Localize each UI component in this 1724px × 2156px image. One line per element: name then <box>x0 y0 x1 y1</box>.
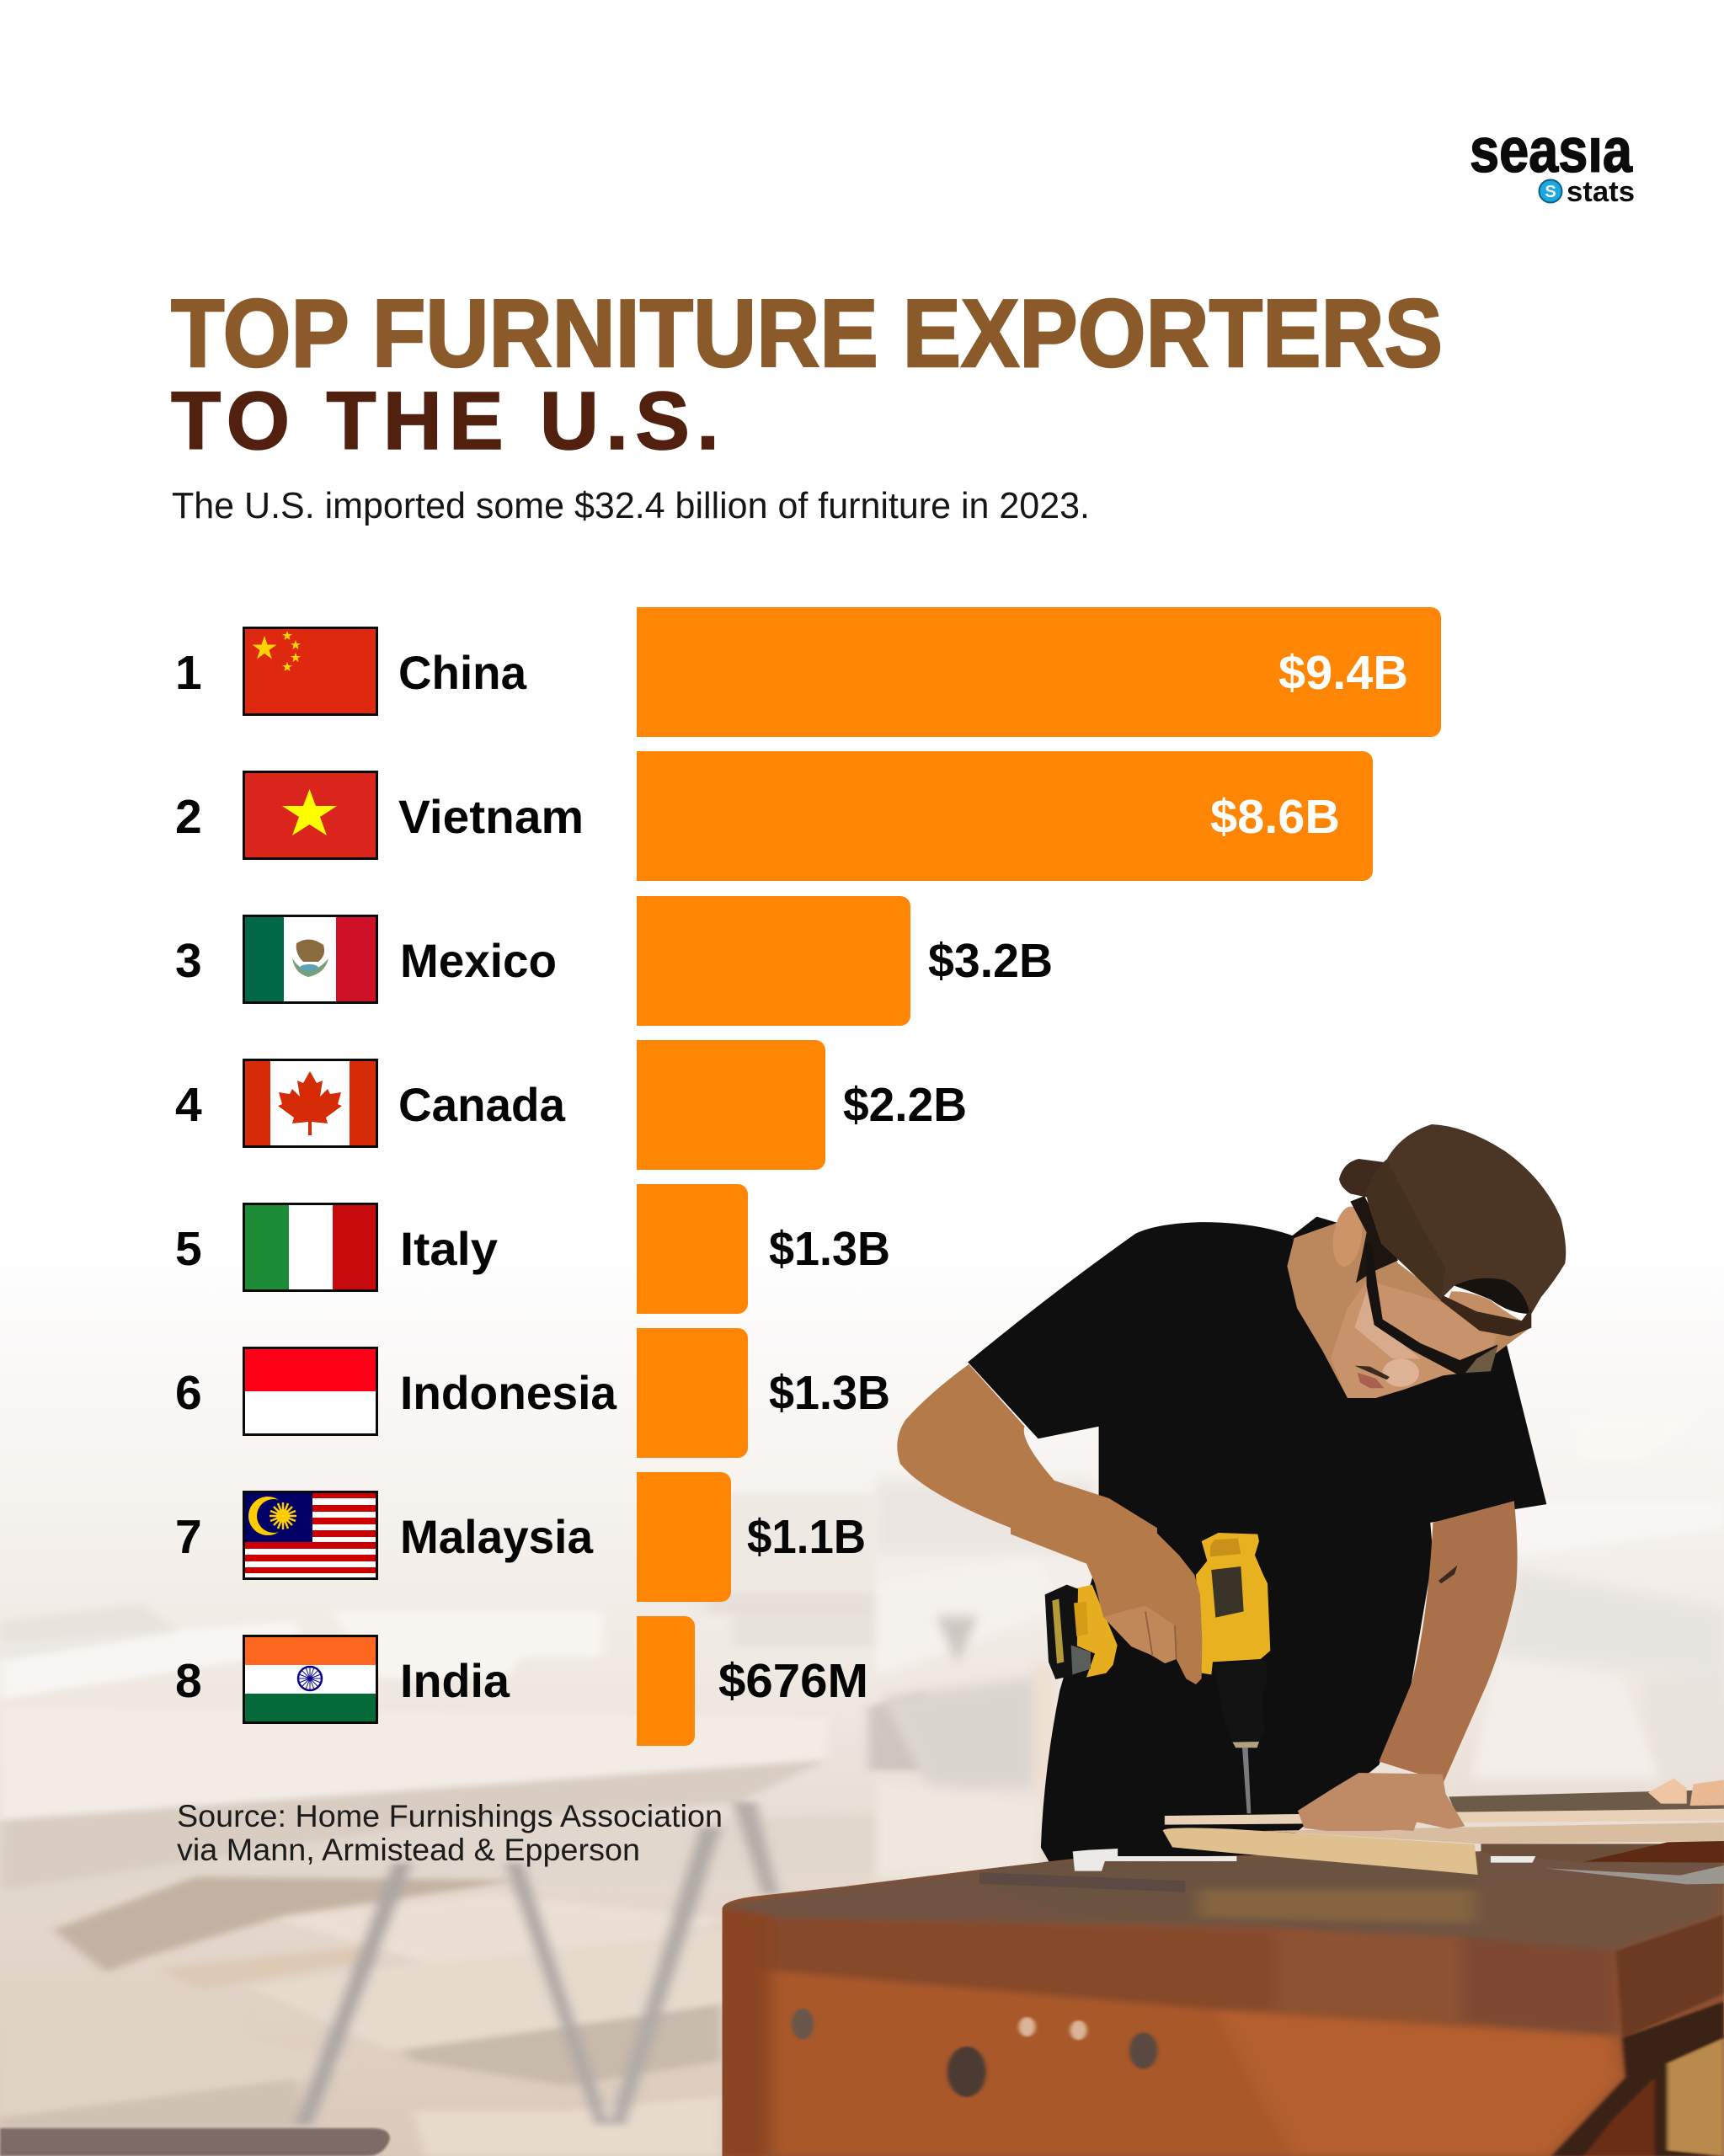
row 2: Vietnam <box>175 751 1373 881</box>
row 7: Malaysia: $1.1B <box>747 1510 866 1564</box>
drill bit <box>1242 1748 1251 1813</box>
hand on board <box>1298 1773 1465 1831</box>
flag: Vietnam <box>244 771 377 859</box>
logo: stats <box>1567 176 1635 208</box>
row 1: China <box>175 607 1441 737</box>
logo globe icon: S <box>1545 183 1556 201</box>
row 8: India: 8 <box>175 1654 202 1708</box>
ear <box>1329 1204 1366 1268</box>
logo globe icon <box>1540 180 1561 202</box>
chuck <box>1214 1660 1268 1742</box>
row 8: India: India <box>400 1654 510 1707</box>
hair under cap <box>1454 1278 1530 1314</box>
row 6: Indonesia <box>175 1328 890 1458</box>
row 7: Malaysia: 7 <box>175 1510 202 1564</box>
row 4: Canada <box>175 1040 967 1170</box>
row 8: India: $676M <box>718 1654 868 1708</box>
cap brim <box>1339 1159 1384 1198</box>
row 8: India <box>175 1616 868 1746</box>
drill body <box>1196 1533 1270 1674</box>
safety glasses <box>1354 1244 1497 1374</box>
row 6: Indonesia: $1.3B <box>769 1366 890 1420</box>
neck and face <box>1287 1210 1530 1398</box>
flag: Canada <box>244 1059 377 1147</box>
row 5: Italy: $1.3B <box>769 1222 890 1276</box>
flag: Italy <box>244 1204 377 1290</box>
near arm <box>897 1364 1157 1582</box>
hair <box>1350 1196 1398 1283</box>
row 5: Italy <box>175 1184 890 1314</box>
cap crown <box>1366 1124 1566 1314</box>
head with cap and glasses <box>1287 1124 1566 1398</box>
dark bar at bottom left <box>0 2128 390 2156</box>
title: TO THE U.S. <box>171 375 719 467</box>
row 2: Vietnam: 2 <box>175 790 202 844</box>
worker with drill <box>897 1124 1566 1866</box>
logo: seasia <box>1470 115 1633 185</box>
flag: China <box>244 628 377 714</box>
title: TOP FURNITURE EXPORTERS <box>171 280 1443 387</box>
flag: Malaysia <box>244 1492 377 1578</box>
boards and tools on bench <box>979 1779 1724 1892</box>
black t-shirt <box>968 1217 1546 1866</box>
row 6: Indonesia: Indonesia <box>400 1366 617 1419</box>
row 7: Malaysia: Malaysia <box>400 1510 594 1563</box>
row 1: China: $9.4B <box>1278 646 1408 700</box>
row 7: Malaysia <box>175 1472 866 1602</box>
row 2: Vietnam: $8.6B <box>1210 790 1340 844</box>
row 5: Italy: 5 <box>175 1222 202 1276</box>
flag: Indonesia <box>244 1348 377 1435</box>
title <box>171 280 1443 467</box>
logo <box>1470 115 1635 208</box>
source note <box>177 1799 723 1867</box>
flag: India <box>244 1636 377 1723</box>
flag: Mexico <box>244 916 377 1002</box>
row 1: China: China <box>398 646 527 699</box>
cap strap <box>1440 1295 1531 1337</box>
row 4: Canada: 4 <box>175 1078 202 1132</box>
row 3: Mexico: Mexico <box>400 934 557 987</box>
drill label <box>1211 1566 1244 1618</box>
row 1: China: 1 <box>175 646 202 700</box>
battery <box>1045 1585 1118 1679</box>
row 6: Indonesia: 6 <box>175 1366 202 1420</box>
source note: via Mann, Armistead & Epperson <box>177 1833 640 1867</box>
row 4: Canada: Canada <box>398 1078 566 1131</box>
faded workshop background photo <box>0 1245 1724 2156</box>
row 3: Mexico: $3.2B <box>928 934 1053 988</box>
cordless drill and gripping hand <box>1011 1499 1270 1813</box>
nose, moustache and lips <box>1354 1358 1419 1388</box>
row 3: Mexico <box>175 896 1053 1026</box>
far arm <box>1379 1501 1518 1782</box>
row 2: Vietnam: Vietnam <box>398 790 584 843</box>
subtitle: The U.S. imported some $32.4 billion of furniture in 2023. <box>172 485 1090 526</box>
bench body <box>716 1844 1724 2156</box>
bar chart of exporters <box>175 607 1441 1746</box>
row 4: Canada: $2.2B <box>843 1078 967 1132</box>
forehead <box>1446 1291 1522 1337</box>
workbench <box>716 1773 1724 2156</box>
row 3: Mexico: 3 <box>175 934 202 988</box>
source note: Source: Home Furnishings Association <box>177 1799 723 1833</box>
hand <box>1011 1499 1202 1684</box>
row 5: Italy: Italy <box>400 1222 498 1275</box>
